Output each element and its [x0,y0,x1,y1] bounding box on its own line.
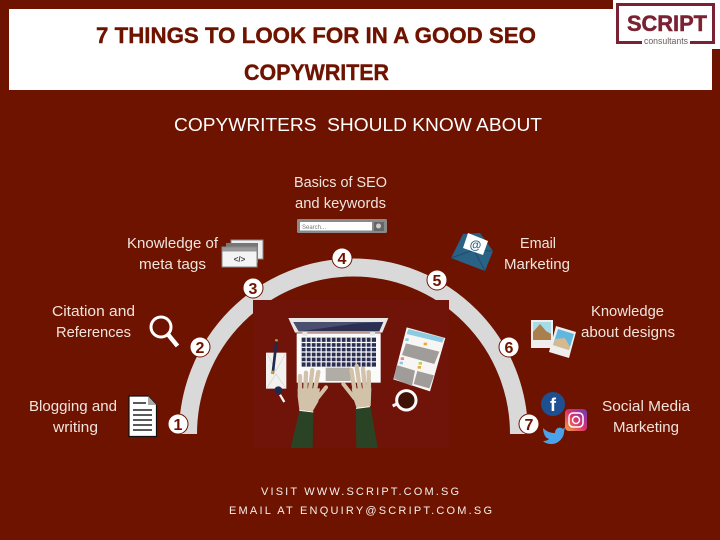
number 5 [427,270,447,290]
step 2: citation and references: Citation and [52,304,135,320]
number 4: 4 [338,251,347,268]
number 5: 5 [433,273,442,290]
central illustration: laptop on desk [253,300,449,448]
footer contact details [229,486,492,517]
icon: facebook [541,392,565,416]
icon: magnifying glass [151,317,178,346]
step 3: knowledge of meta tags: Knowledge of [127,236,219,252]
step 7: social media marketing: Marketing [613,420,679,436]
number 1: 1 [174,417,183,434]
newspaper [393,327,445,391]
logo: Script Consultants: consultants [644,36,688,47]
step 4: basics of SEO and keywords [294,175,387,268]
number 2 [190,337,210,357]
logo: Script Consultants: SCRIPT [627,11,708,36]
icon: facebook: f [550,395,557,415]
coffee cup [393,391,416,410]
number 3: 3 [249,281,258,298]
title banner: COPYWRITER [244,60,389,85]
logo: Script Consultants [613,0,720,49]
step 2: citation and references [52,304,210,357]
step 3: knowledge of meta tags [127,236,263,298]
step 5: email marketing: Marketing [504,257,570,273]
left hand [291,370,326,448]
step 1: blogging and writing: Blogging and [29,399,117,415]
icon: document [129,396,156,436]
number 1 [168,414,188,434]
step 3: knowledge of meta tags: meta tags [139,257,206,273]
number 6 [499,337,519,357]
subtitle: COPYWRITERS SHOULD KNOW ABOUT [174,115,542,135]
right hand [343,366,378,448]
step 6: knowledge about designs [499,304,675,358]
step 7: social media marketing: Social Media [602,399,691,415]
icon: photos [531,320,576,358]
step 2: citation and references: References [56,325,131,341]
step 1: blogging and writing [29,396,188,436]
step 1: blogging and writing: writing [52,420,98,436]
icon: envelope [451,233,493,271]
step 5: email marketing [427,233,570,290]
footer contact details: VISIT WWW.SCRIPT.COM.SG [261,486,459,498]
step 4: basics of SEO and keywords: and keywords [295,196,386,212]
step 6: knowledge about designs: about designs [581,325,675,341]
number 2: 2 [196,340,205,357]
laptop [288,318,388,383]
footer contact details: EMAIL AT ENQUIRY@SCRIPT.COM.SG [229,505,492,517]
semicircular arc [188,268,519,434]
number 7 [519,414,539,434]
title banner [9,9,712,90]
icon: instagram [565,409,587,431]
step 4: basics of SEO and keywords: Basics of SEO [294,175,387,191]
icon: envelope: @ [470,238,481,252]
icon: twitter [543,427,565,444]
title banner: 7 THINGS TO LOOK FOR IN A GOOD SEO [96,23,536,48]
icon: code windows: </> [234,255,246,264]
number 6: 6 [505,340,514,357]
icon: search box: Search... [302,225,326,231]
step 7: social media marketing [519,392,691,444]
envelope with pen and key [266,339,286,402]
step 6: knowledge about designs: Knowledge [591,304,664,320]
number 7: 7 [525,417,534,434]
step 5: email marketing: Email [520,236,556,252]
